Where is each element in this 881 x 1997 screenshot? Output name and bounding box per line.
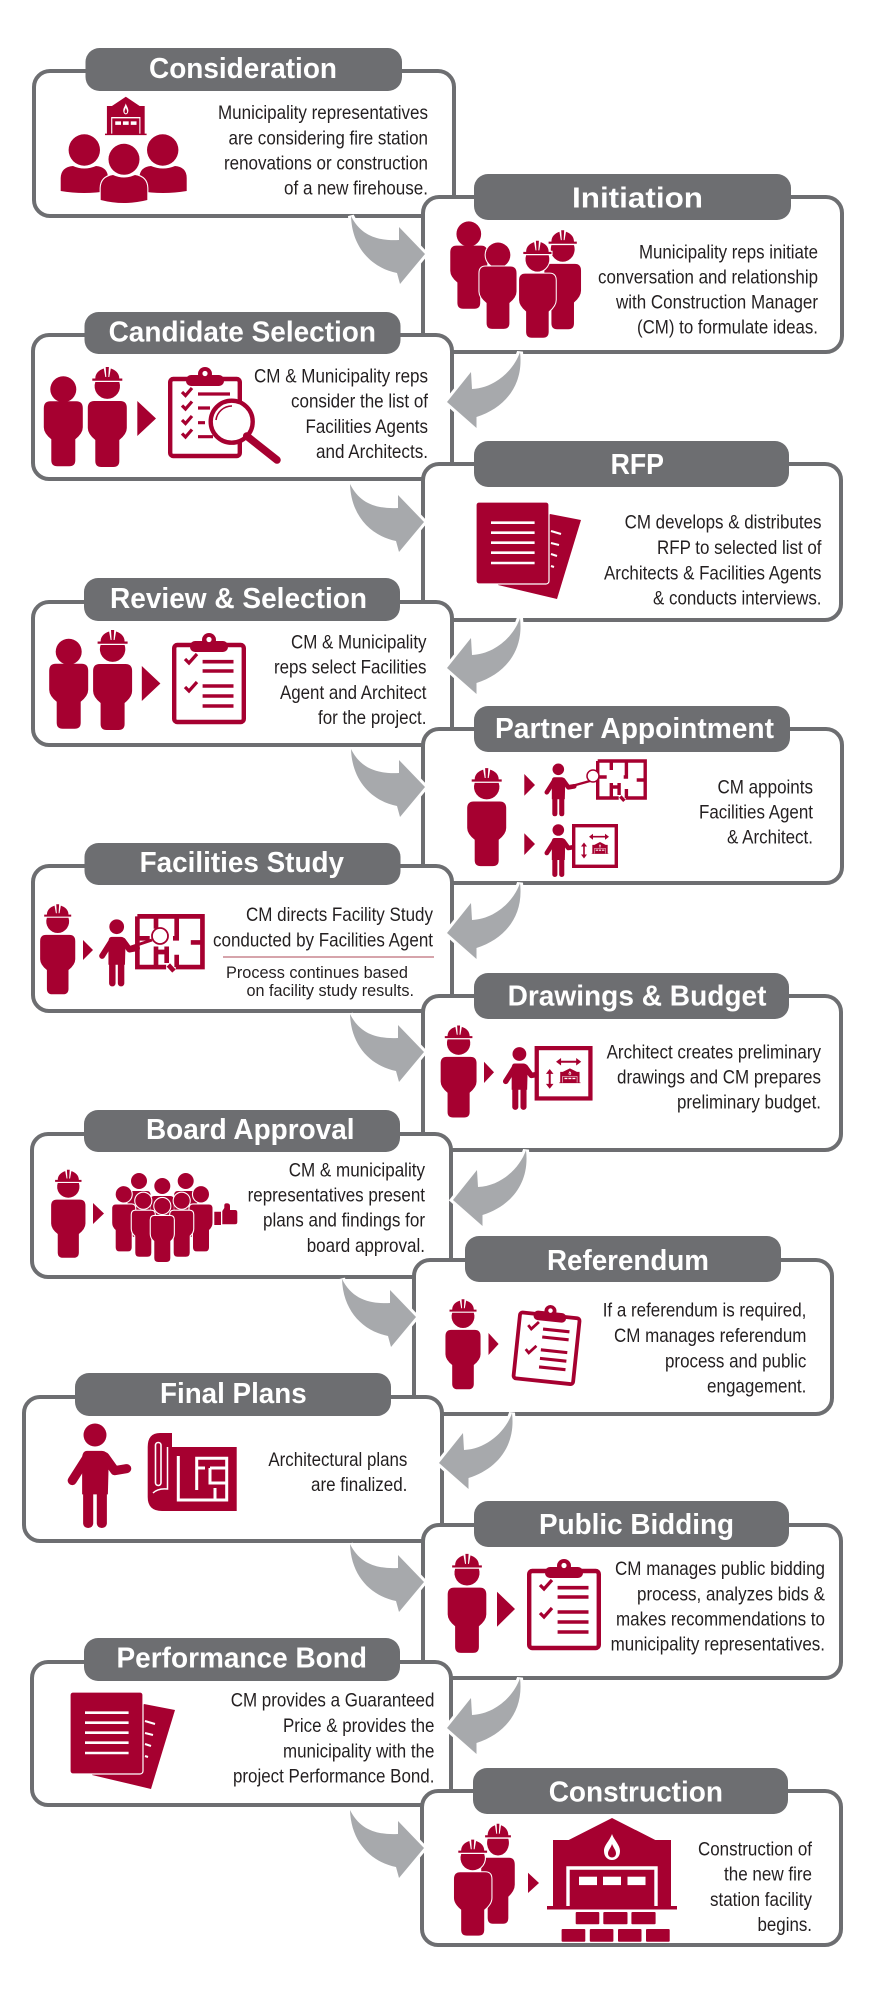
heading: Initiation: Initiation xyxy=(572,183,703,215)
icon: rep and manager reviewing candidate list xyxy=(44,367,277,467)
heading: Public Bidding xyxy=(474,1501,789,1547)
text block: RFP xyxy=(604,512,822,609)
text block: Candidate Selection: consider the list of xyxy=(291,391,428,413)
text block: Board Approval xyxy=(248,1159,426,1257)
heading: RFP: RFP xyxy=(611,449,664,481)
heading: Partner Appointment xyxy=(474,706,790,752)
heading: Public Bidding: Public Bidding xyxy=(539,1509,734,1541)
text block: RFP: & conducts interviews. xyxy=(653,587,822,609)
text block: Partner Appointment xyxy=(699,776,813,848)
text block: Partner Appointment: & Architect. xyxy=(727,826,813,848)
icon: rep and manager with checklist xyxy=(49,630,244,730)
text block: Candidate Selection: CM & Municipality reps xyxy=(254,365,428,387)
text block: Referendum xyxy=(603,1300,807,1397)
icon: workers building the new fire station xyxy=(454,1818,677,1942)
heading: Referendum xyxy=(465,1236,781,1282)
text block: Public Bidding xyxy=(611,1558,825,1655)
icon: manager appointing facilities agent and architect xyxy=(467,761,645,877)
arrow: Public Bidding to Performance Bond xyxy=(447,1678,521,1754)
icon: bond documents xyxy=(70,1692,175,1789)
text block: Referendum: CM manages referendum xyxy=(614,1325,806,1347)
arrow: Performance Bond to Construction xyxy=(350,1810,424,1878)
arrow: Initiation to Candidate Selection xyxy=(447,352,521,428)
heading: Board Approval xyxy=(84,1110,400,1152)
text block: Initiation: with Construction Manager xyxy=(615,292,818,314)
arrow: Consideration to Initiation xyxy=(351,216,425,284)
text block: Referendum: engagement. xyxy=(707,1375,806,1397)
text block: Review & Selection: Agent and Architect xyxy=(280,682,427,704)
text block: Performance Bond: municipality with the xyxy=(283,1740,434,1762)
text block: Review & Selection: reps select Facilities xyxy=(274,657,427,679)
heading: Candidate Selection: Candidate Selection xyxy=(109,317,376,349)
heading: Drawings & Budget: Drawings & Budget xyxy=(508,981,767,1013)
text block: Performance Bond: project Performance Bond. xyxy=(233,1765,434,1787)
text block: Public Bidding: municipality representatives. xyxy=(611,1633,825,1655)
text block: Construction xyxy=(698,1838,812,1936)
text block: Construction: begins. xyxy=(758,1914,812,1936)
panel: Final Plans xyxy=(24,1373,442,1541)
text block: Public Bidding: process, analyzes bids & xyxy=(637,1583,825,1605)
heading: Facilities Study xyxy=(84,843,400,885)
heading: Consideration: Consideration xyxy=(149,53,337,85)
text block: Construction: station facility xyxy=(710,1889,812,1911)
text block: Construction: Construction of xyxy=(698,1838,812,1860)
panel: Candidate Selection xyxy=(33,312,452,479)
text block: Board Approval: representatives present xyxy=(248,1185,426,1207)
heading: Final Plans xyxy=(75,1373,391,1416)
text block: Referendum: If a referendum is required, xyxy=(603,1300,806,1322)
heading: Drawings & Budget xyxy=(474,973,789,1019)
icon: community and firehouse xyxy=(61,97,187,203)
text block: Drawings & Budget xyxy=(607,1041,821,1114)
icon: manager directing facility study xyxy=(40,904,202,994)
panel: Review & Selection xyxy=(33,578,452,745)
text block: Construction: the new fire xyxy=(724,1864,812,1886)
note: process continues: Process continues based xyxy=(226,963,408,982)
arrow: Referendum to Final Plans xyxy=(439,1413,513,1489)
icon: municipality reps and construction managers xyxy=(450,221,581,338)
arrow: Partner Appointment to Facilities Study xyxy=(447,883,521,959)
text block: Candidate Selection xyxy=(254,365,428,463)
text block: Performance Bond xyxy=(231,1690,434,1787)
text block: Consideration: Municipality representatives xyxy=(218,102,428,124)
heading: Facilities Study: Facilities Study xyxy=(140,847,344,879)
text block: Initiation: Municipality reps initiate xyxy=(639,241,818,263)
text block: Board Approval: CM & municipality xyxy=(289,1159,425,1181)
text block: Consideration xyxy=(218,102,428,200)
note: process continues xyxy=(226,963,414,1000)
panel: Public Bidding xyxy=(423,1501,841,1678)
panel: Initiation xyxy=(423,174,842,352)
text block: Drawings & Budget: drawings and CM prepares xyxy=(617,1066,821,1088)
heading: Partner Appointment: Partner Appointment xyxy=(495,713,774,745)
text block: Final Plans: Architectural plans xyxy=(268,1449,408,1471)
text block: Partner Appointment: Facilities Agent xyxy=(699,801,813,823)
text block: Facilities Study xyxy=(213,904,433,952)
text block: Review & Selection xyxy=(274,631,427,729)
text block: Public Bidding: makes recommendations to xyxy=(616,1608,825,1630)
panel: Performance Bond xyxy=(32,1638,451,1805)
text block: Partner Appointment: CM appoints xyxy=(718,776,813,798)
arrow: Drawings & Budget to Board Approval xyxy=(453,1150,527,1226)
heading: Construction xyxy=(473,1768,788,1814)
heading: Performance Bond xyxy=(84,1638,400,1681)
arrow: RFP to Review & Selection xyxy=(447,618,521,694)
heading: Initiation xyxy=(474,174,791,220)
text block: RFP: RFP to selected list of xyxy=(657,537,822,559)
text block: Board Approval: plans and findings for xyxy=(263,1210,425,1232)
text block: Performance Bond: Price & provides the xyxy=(283,1715,434,1737)
heading: Final Plans: Final Plans xyxy=(160,1378,307,1410)
heading: Performance Bond: Performance Bond xyxy=(116,1643,367,1675)
text block: Initiation: (CM) to formulate ideas. xyxy=(637,317,818,339)
heading: Referendum: Referendum xyxy=(547,1245,709,1277)
text block: Consideration: of a new firehouse. xyxy=(284,178,428,200)
text block: RFP: CM develops & distributes xyxy=(625,512,822,534)
text block: Final Plans xyxy=(268,1449,408,1496)
text block: Consideration: are considering fire station xyxy=(228,127,428,149)
arrow: Facilities Study to Drawings & Budget xyxy=(350,1014,424,1082)
heading: Board Approval: Board Approval xyxy=(146,1114,354,1146)
heading: Review & Selection: Review & Selection xyxy=(110,583,367,615)
icon: manager and referendum checklist xyxy=(445,1299,581,1389)
text block: Review & Selection: for the project. xyxy=(318,707,426,729)
text block: RFP: Architects & Facilities Agents xyxy=(604,562,822,584)
arrow: Board Approval to Referendum xyxy=(342,1279,416,1347)
note: process continues: on facility study results. xyxy=(246,981,414,1000)
panel: Facilities Study xyxy=(33,843,452,1011)
heading: RFP xyxy=(474,441,789,487)
text block: Referendum: process and public xyxy=(665,1350,807,1372)
panel: Board Approval xyxy=(32,1110,451,1277)
text block: Initiation: conversation and relationship xyxy=(598,267,818,289)
panel: Consideration xyxy=(34,48,454,216)
heading: Consideration xyxy=(86,48,402,91)
text block: Candidate Selection: Facilities Agents xyxy=(306,416,428,438)
text block: Public Bidding: CM manages public bidding xyxy=(615,1558,825,1580)
icon: architect drawings and manager xyxy=(441,1026,590,1118)
panel: Drawings & Budget xyxy=(423,973,841,1150)
icon: manager presenting to approving board xyxy=(51,1170,237,1262)
text block: Drawings & Budget: Architect creates preliminary xyxy=(607,1041,821,1063)
arrow: Review & Selection to Partner Appointment xyxy=(351,749,425,817)
heading: Construction: Construction xyxy=(549,1777,723,1809)
panel: Construction xyxy=(422,1768,841,1945)
panel: RFP xyxy=(423,441,841,620)
text block: Board Approval: board approval. xyxy=(307,1235,425,1257)
heading: Candidate Selection xyxy=(84,312,400,354)
heading: Review & Selection xyxy=(84,578,400,621)
panel: Partner Appointment xyxy=(423,706,842,883)
panel: Referendum xyxy=(414,1236,832,1414)
text block: Facilities Study: CM directs Facility Study xyxy=(246,904,433,926)
icon: manager and bid checklist xyxy=(448,1554,599,1653)
icon: RFP documents xyxy=(476,502,581,599)
arrow: Candidate Selection to RFP xyxy=(350,484,424,552)
text block: Drawings & Budget: preliminary budget. xyxy=(677,1092,821,1114)
text block: Initiation xyxy=(598,241,818,339)
text block: Final Plans: are finalized. xyxy=(311,1474,407,1496)
text block: Candidate Selection: and Architects. xyxy=(316,441,428,463)
icon: person with blueprint xyxy=(72,1424,237,1528)
text block: Performance Bond: CM provides a Guaranteed xyxy=(231,1690,434,1712)
text block: Review & Selection: CM & Municipality xyxy=(291,631,427,653)
arrow: Final Plans to Public Bidding xyxy=(350,1544,424,1612)
text block: Consideration: renovations or construction xyxy=(224,152,428,174)
text block: Facilities Study: conducted by Facilities Agent xyxy=(213,930,433,952)
